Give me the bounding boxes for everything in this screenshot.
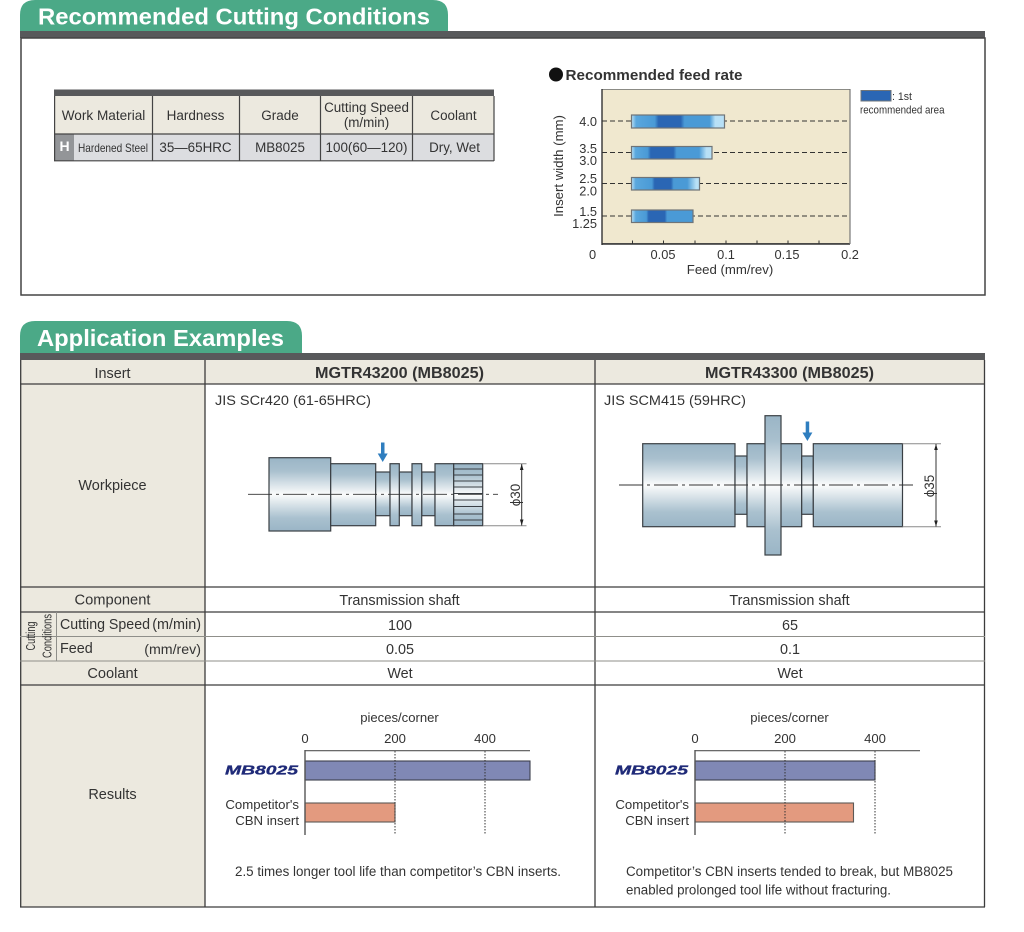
table: cutting conditions: H <box>59 138 70 154</box>
bar chart: results right: pieces/corner <box>750 710 829 725</box>
table: cutting conditions: 35—65HRC <box>159 140 232 155</box>
table: cutting conditions: Hardness <box>167 108 225 123</box>
bar chart: results right: Competitor's <box>615 797 689 812</box>
row: coolant <box>87 666 803 682</box>
row: cutting speed: 65 <box>782 618 798 634</box>
bar chart: results left: 0 <box>301 731 309 746</box>
bar: MB8025 <box>305 761 530 780</box>
y axis labels: 3.5 <box>579 141 597 156</box>
table: cutting conditions: Grade <box>261 108 299 123</box>
table: cutting conditions: Dry, Wet <box>429 140 480 155</box>
bar chart: results left: 400 <box>474 731 496 746</box>
table: cutting conditions <box>54 90 494 161</box>
table: cutting conditions: (m/min) <box>344 115 389 130</box>
plot area <box>602 89 850 245</box>
workpiece label right: JIS SCM415 (59HRC) <box>604 393 746 409</box>
x axis labels: 0.2 <box>841 247 859 262</box>
drawing: shaft 1 <box>248 442 526 531</box>
y axis labels: 1.25 <box>572 216 597 231</box>
row label: results: Results <box>88 787 137 803</box>
result note left: 2.5 times longer tool life than competitor’s CBN inserts. <box>235 864 561 879</box>
table: cutting conditions: Work Material <box>62 108 145 123</box>
chart title: Recommended feed rate <box>566 67 742 84</box>
row: insert: MGTR43200 (MB8025) <box>315 365 484 382</box>
panel: recommended cutting conditions <box>20 0 985 295</box>
table: cutting conditions: 100(60—120) <box>326 140 407 155</box>
arrow: cutting position <box>802 422 812 441</box>
drawing: shaft 2: ϕ35 <box>922 475 937 497</box>
row: insert <box>94 365 874 382</box>
heading tab: Recommended Cutting Conditions: Recommended Cutting Conditions <box>38 4 430 30</box>
bar chart: results left: Competitor's <box>225 797 299 812</box>
workpiece label left: JIS SCr420 (61-65HRC) <box>215 393 371 409</box>
bar: MB8025 <box>695 761 875 780</box>
row group label: cutting conditions: Cutting <box>23 622 38 650</box>
row: cutting speed <box>60 617 798 634</box>
bar chart: results right: 0 <box>691 731 699 746</box>
legend <box>860 90 945 116</box>
row label: workpiece: Workpiece <box>78 478 147 494</box>
row: cutting speed: (m/min) <box>152 617 201 633</box>
result note right: enabled prolonged tool life without fracturing. <box>626 882 891 898</box>
legend: recommended area <box>860 104 945 116</box>
bar: competitor <box>305 803 395 822</box>
row: cutting speed: Cutting Speed <box>60 617 150 633</box>
x axis labels: 0.05 <box>651 247 675 262</box>
y axis title: Insert width (mm) <box>551 115 566 217</box>
brand label: MB8025: MB8025 <box>225 764 300 778</box>
x axis labels: 0.15 <box>775 247 799 262</box>
table: cutting conditions: Coolant <box>430 108 477 123</box>
heading tab: Application Examples: Application Examples <box>37 325 284 351</box>
y axis labels: 3.0 <box>579 153 597 168</box>
row: feed: (mm/rev) <box>144 642 201 658</box>
result note right <box>626 864 953 898</box>
table: cutting conditions: Hardened Steel <box>78 141 148 155</box>
y axis labels: 2.5 <box>579 171 597 186</box>
row: component: Transmission shaft <box>339 593 460 609</box>
table grid <box>20 360 985 907</box>
row: feed: 0.05 <box>386 642 414 658</box>
row: component: Transmission shaft <box>729 593 850 609</box>
feed range bars <box>632 115 724 222</box>
y axis labels: 2.0 <box>579 184 597 198</box>
chart: recommended feed rate <box>549 67 945 277</box>
table background: label column <box>21 360 205 907</box>
bar chart: results left: pieces/corner <box>360 710 439 725</box>
drawing: shaft 2 <box>619 416 941 555</box>
row: coolant: Wet <box>387 666 413 682</box>
bar chart: results left: CBN insert <box>235 813 299 828</box>
row: feed: Feed <box>60 641 93 657</box>
brand label: MB8025: MB8025 <box>615 764 690 778</box>
row: feed <box>60 641 800 658</box>
x axis labels <box>589 247 859 262</box>
bar: competitor <box>695 803 854 822</box>
row: cutting speed: 100 <box>388 618 412 634</box>
row: component: Component <box>75 592 150 608</box>
row: coolant: Wet <box>777 666 803 682</box>
bar chart: results left <box>225 710 530 835</box>
row group label: cutting conditions: Conditions <box>40 614 54 658</box>
row group label: cutting conditions <box>23 614 54 658</box>
y axis labels <box>572 114 597 231</box>
y axis labels: 4.0 <box>579 114 597 129</box>
bar chart: results right <box>615 710 920 835</box>
row: coolant: Coolant <box>87 666 138 682</box>
panel: application examples <box>20 321 985 907</box>
bar chart: results right: 200 <box>774 731 796 746</box>
row: feed: 0.1 <box>780 642 800 658</box>
bar chart: results left: 200 <box>384 731 406 746</box>
result note right: Competitor’s CBN inserts tended to break, but MB8025 <box>626 864 953 879</box>
table: cutting conditions: MB8025 <box>255 140 305 155</box>
legend: : 1st <box>892 91 912 103</box>
arrow: cutting position <box>378 442 388 462</box>
row: component <box>75 592 850 609</box>
row: insert: MGTR43300 (MB8025) <box>705 365 874 382</box>
bar chart: results right: 400 <box>864 731 886 746</box>
y axis labels: 1.5 <box>579 204 597 219</box>
row: insert: Insert <box>94 366 130 382</box>
heading tab: Application Examples <box>20 321 302 353</box>
table: cutting conditions: Cutting Speed <box>324 100 409 115</box>
drawing: shaft 1: ϕ30 <box>508 484 523 506</box>
x axis title: Feed (mm/rev) <box>687 262 773 277</box>
x axis labels: 0 <box>589 247 596 262</box>
bar chart: results right: CBN insert <box>625 813 689 828</box>
x axis labels: 0.1 <box>717 247 735 262</box>
